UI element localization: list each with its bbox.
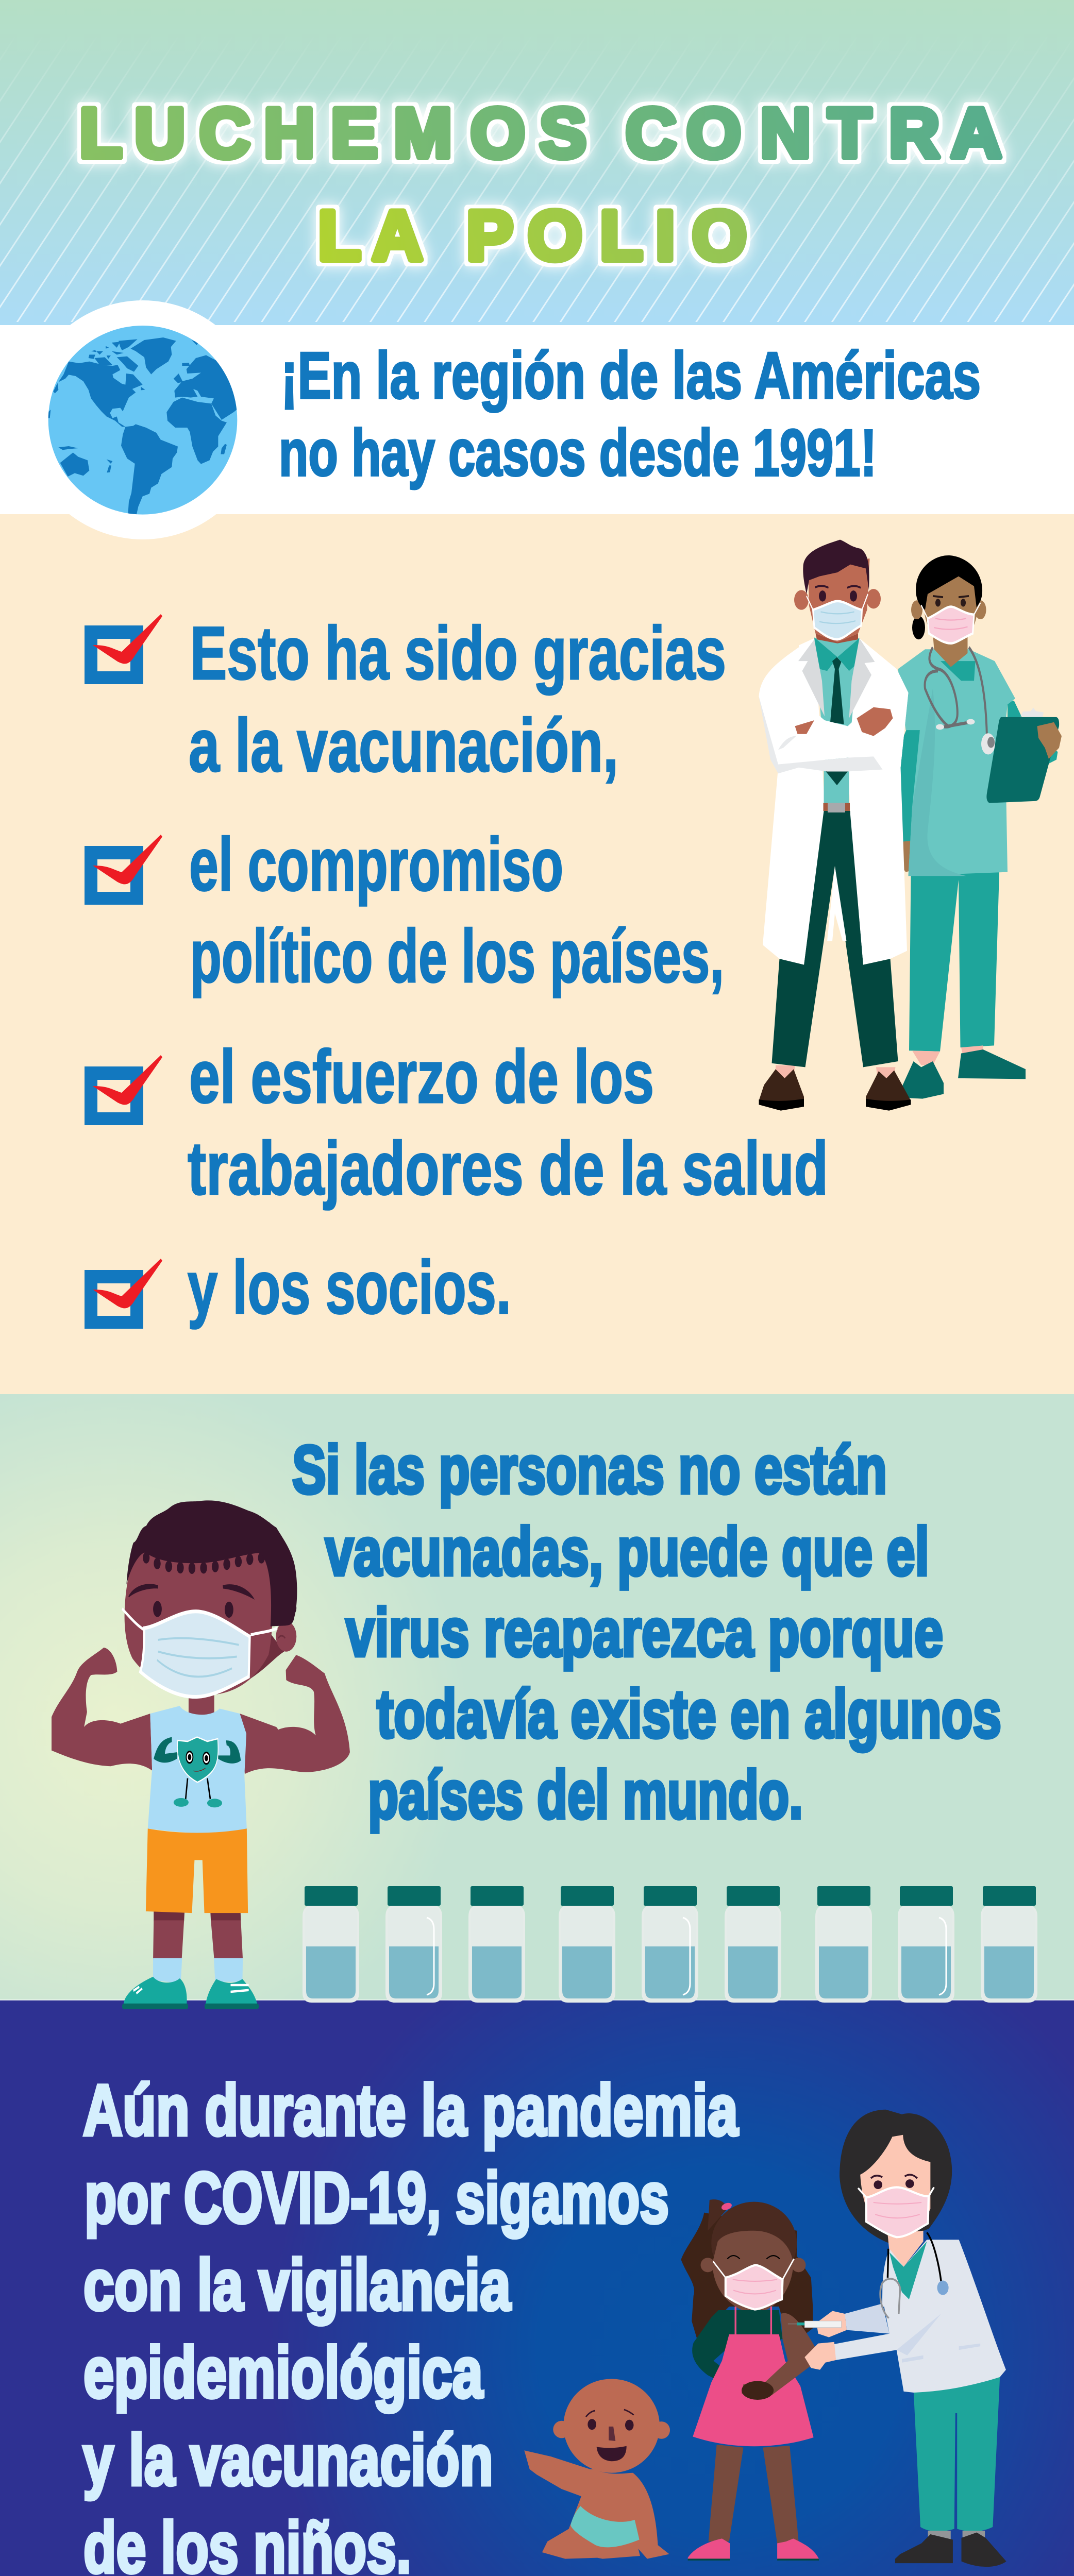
text: item 4: y los socios. [188,1245,511,1329]
icon: checkbox 2 [85,835,162,905]
vial 2 [387,1886,441,2002]
illustration: vaccination scene [524,2110,1006,2567]
baby [524,2379,670,2559]
checklist item 1 [85,611,726,787]
text: warning: Si las personas no están [292,1432,887,1507]
vials row [304,1886,1036,2002]
text: pandemic [83,2070,739,2576]
vial 1 [304,1886,358,2002]
checklist item 2 [85,822,724,998]
vial 9 [982,1886,1036,2002]
text: item 1 [189,611,726,787]
title: LA POLIO [318,196,747,275]
text: warning: países del mundo. [368,1757,803,1833]
checklist item 3 [85,1035,828,1210]
icon: checkbox 3 [85,1055,162,1125]
text: item 2: el compromiso [189,822,563,906]
nurse with syringe [788,2110,1006,2567]
title [79,94,1001,275]
nurse [889,555,1062,1099]
vial 8 [899,1886,953,2002]
text: pandemic: epidemiológica [83,2332,483,2413]
text: pandemic: y la vacunación [83,2419,493,2500]
checklist item 4 [85,1245,511,1329]
vial 4 [560,1886,614,2002]
text: pandemic: Aún durante la pandemia [83,2070,739,2150]
text: banner: no hay casos desde 1991! [279,416,877,490]
panel: dark blue [0,2000,1074,2576]
vial 3 [469,1886,524,2002]
icon: checkbox 4 [85,1259,162,1329]
vial 7 [816,1886,871,2002]
illustration: boy flexing [52,1500,350,2009]
girl [681,2199,819,2560]
illustration: health workers [759,539,1062,1111]
text: item 3: el esfuerzo de los [189,1035,654,1118]
text: item 3 [188,1035,828,1210]
text: banner [279,339,981,490]
panel: green message [0,1394,1074,2009]
icon: globe [48,326,238,515]
text: pandemic: por COVID-19, sigamos [85,2157,669,2238]
vial 6 [726,1886,780,2002]
shield mascot on shirt [154,1737,241,1807]
text: item 3: trabajadores de la salud [188,1126,828,1210]
panel: white banner [48,300,980,539]
text: item 1: Esto ha sido gracias [190,611,726,695]
panel: header [0,0,1074,325]
icon: checkbox 1 [85,614,162,684]
doctor [759,539,911,1111]
title: LUCHEMOS CONTRA [79,94,1001,172]
text: pandemic: con la vigilancia [83,2244,511,2325]
vial 5 [643,1886,697,2002]
text: item 1: a la vacunación, [189,703,618,787]
text: item 2: político de los países, [190,914,724,998]
text: item 2 [189,822,724,998]
panel: beige checklist [0,514,1074,1394]
text: warning [292,1432,1001,1833]
